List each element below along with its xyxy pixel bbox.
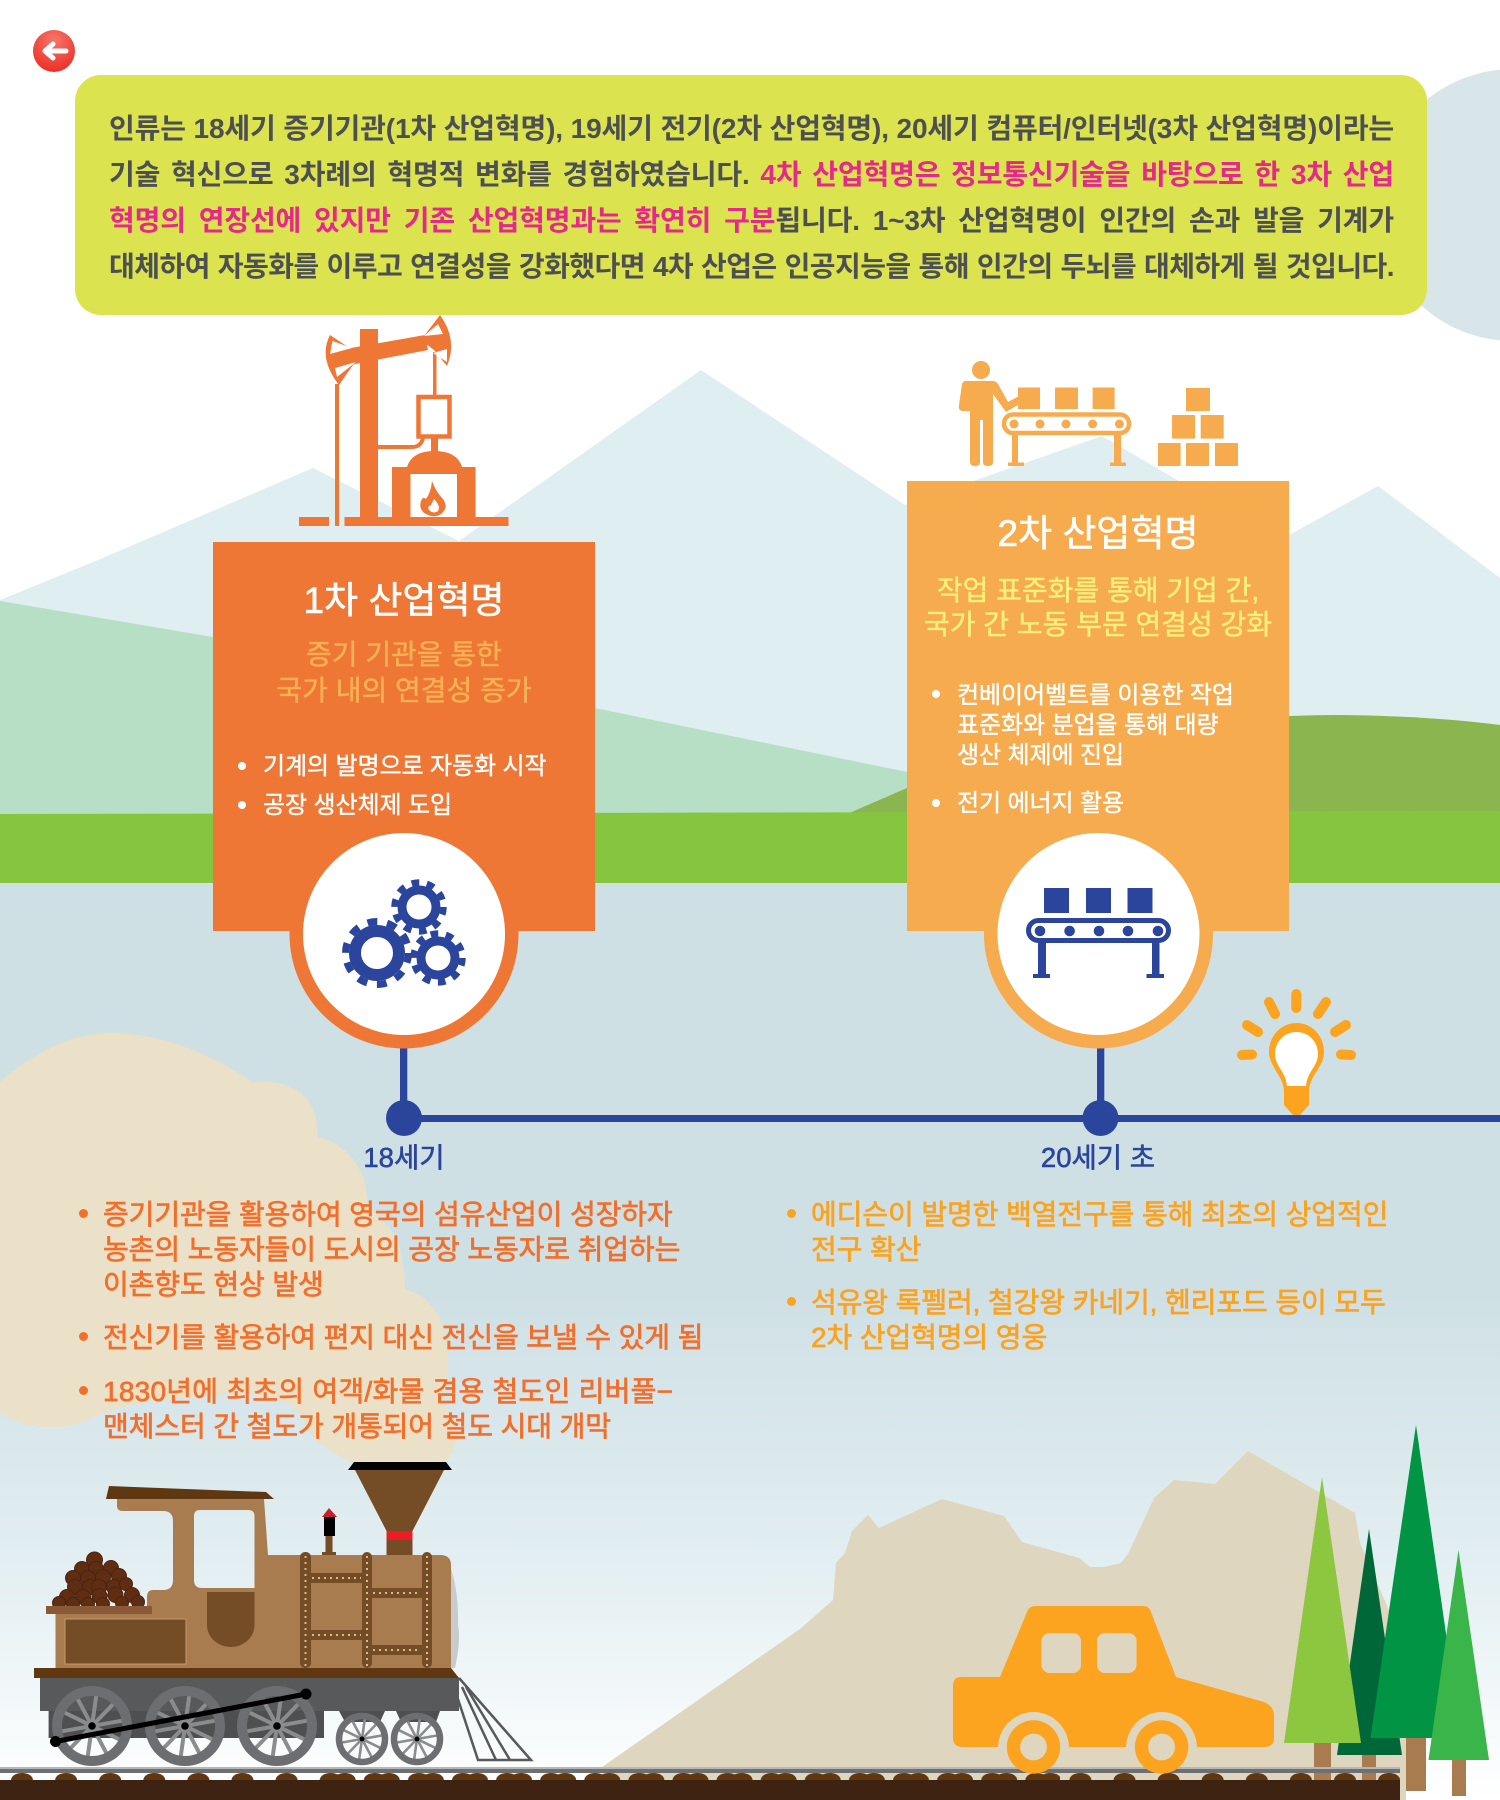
panel: 2nd industrial revolution	[907, 481, 1289, 931]
text block: 1st revolution facts	[79, 1199, 703, 1442]
bullet list: 기계의 발명으로 자동화 시작	[263, 753, 546, 780]
tender rim	[46, 1606, 152, 1614]
green ground band	[0, 811, 1500, 883]
icon: light bulb	[1242, 994, 1351, 1115]
timeline axis	[386, 1048, 1500, 1136]
text block: 1st revolution facts: 농촌의 노동자들이 도시의 공장 노동자로 취업하는	[103, 1234, 680, 1265]
light blue mountains	[0, 370, 1500, 820]
icon: coal pile	[52, 1552, 144, 1610]
subtitle: 국가 내의 연결성 증가	[276, 675, 532, 706]
bullet list: 전기 에너지 활용	[957, 790, 1124, 817]
text block: 1st revolution facts: 전신기를 활용하여 편지 대신 전신을 보낼 수 있게 됨	[103, 1322, 703, 1353]
chimney	[348, 1462, 452, 1555]
sky and water gradient	[0, 883, 1500, 1800]
steam locomotive	[34, 1462, 531, 1762]
whistle	[322, 1508, 337, 1555]
pine trees	[1284, 1425, 1489, 1796]
heading: 1차 산업혁명: 1차 산업혁명	[303, 580, 505, 621]
icon: flame	[420, 481, 446, 516]
chassis	[34, 1668, 459, 1738]
subtitle	[276, 639, 532, 706]
icon: conveyor in circle	[984, 820, 1213, 1048]
pale green hill	[0, 601, 1130, 814]
subtitle	[924, 574, 1272, 640]
bullet list: 컨베이어벨트를 이용한 작업	[957, 682, 1234, 709]
riveted bands	[300, 1552, 432, 1668]
timeline label: 20세기 초: 20세기 초	[1041, 1142, 1155, 1172]
bullet list: 생산 체제에 진입	[957, 742, 1124, 768]
connecting rod	[50, 1688, 312, 1747]
bullet list: 공장 생산체제 도입	[263, 792, 452, 819]
steam cloud	[0, 1033, 458, 1462]
text block: 1st revolution facts: 이촌향도 현상 발생	[103, 1269, 324, 1300]
orange car	[953, 1606, 1274, 1774]
subtitle: 작업 표준화를 통해 기업 간,	[937, 574, 1259, 606]
subtitle: 국가 간 노동 부문 연결성 강화	[924, 608, 1272, 640]
icon: gears in circle	[290, 820, 518, 1048]
intro panel: 인류는 18세기 증기기관(1차 산업혁명), 19세기 전기(2차 산업혁명), 20세기 컴퓨터/인터넷(3차 산업혁명)이라는	[109, 113, 1394, 144]
intro panel	[75, 75, 1427, 315]
intro panel: 대체하여 자동화를 이루고 연결성을 강화했다면 4차 산업은 인공지능을 통해 인간의 두뇌를 대체하게 될 것입니다.	[109, 251, 1394, 282]
timeline label: 18세기: 18세기	[363, 1142, 445, 1172]
text block: 2nd revolution facts: 전구 확산	[811, 1234, 921, 1265]
subtitle: 증기 기관을 통한	[306, 639, 502, 670]
intro panel: 기술 혁신으로 3차례의 혁명적 변화를 경험하였습니다. 4차 산업혁명은 정보통신기술을 바탕으로 한 3차 산업	[109, 159, 1394, 190]
intro panel: 혁명의 연장선에 있지만 기존 산업혁명과는 확연히 구분됩니다. 1~3차 산업혁명이 인간의 손과 발을 기계가	[109, 205, 1394, 236]
panel: 1st industrial revolution	[213, 542, 595, 931]
locomotive body and cab	[56, 1499, 451, 1668]
text block: 2nd revolution facts: 에디슨이 발명한 백열전구를 통해 최초의 상업적인	[811, 1199, 1388, 1230]
decorative circle top right	[1377, 69, 1500, 341]
cab door	[207, 1592, 254, 1647]
locomotive nose	[449, 1563, 459, 1668]
cowcatcher	[455, 1678, 531, 1760]
text block: 1st revolution facts: 1830년에 최초의 여객/화물 겸용 철도인 리버풀−	[103, 1376, 673, 1407]
text block: 2nd revolution facts: 2차 산업혁명의 영웅	[811, 1322, 1047, 1353]
roof	[106, 1486, 274, 1499]
wheels	[57, 1691, 440, 1762]
bullet list: 표준화와 분업을 통해 대량	[957, 712, 1218, 739]
icon: worker at conveyor with boxes	[959, 361, 1238, 466]
text block: 1st revolution facts: 증기기관을 활용하여 영국의 섬유산업이 성장하자	[103, 1199, 673, 1230]
bullet list	[932, 682, 1234, 817]
text block: 1st revolution facts: 맨체스터 간 철도가 개통되어 철도 시대 개막	[103, 1411, 611, 1442]
railway track	[0, 1767, 1400, 1800]
text block: 2nd revolution facts	[787, 1199, 1388, 1353]
beige rocky mountain	[602, 1451, 1406, 1800]
icon: pump jack steam engine	[299, 315, 508, 526]
olive hill	[847, 715, 1500, 814]
heading: 2차 산업혁명: 2차 산업혁명	[997, 513, 1199, 554]
bullet list	[238, 753, 546, 819]
text block: 2nd revolution facts: 석유왕 록펠러, 철강왕 카네기, 헨리포드 등이 모두	[811, 1287, 1386, 1318]
tender panel	[65, 1619, 186, 1664]
back arrow button	[33, 30, 75, 72]
